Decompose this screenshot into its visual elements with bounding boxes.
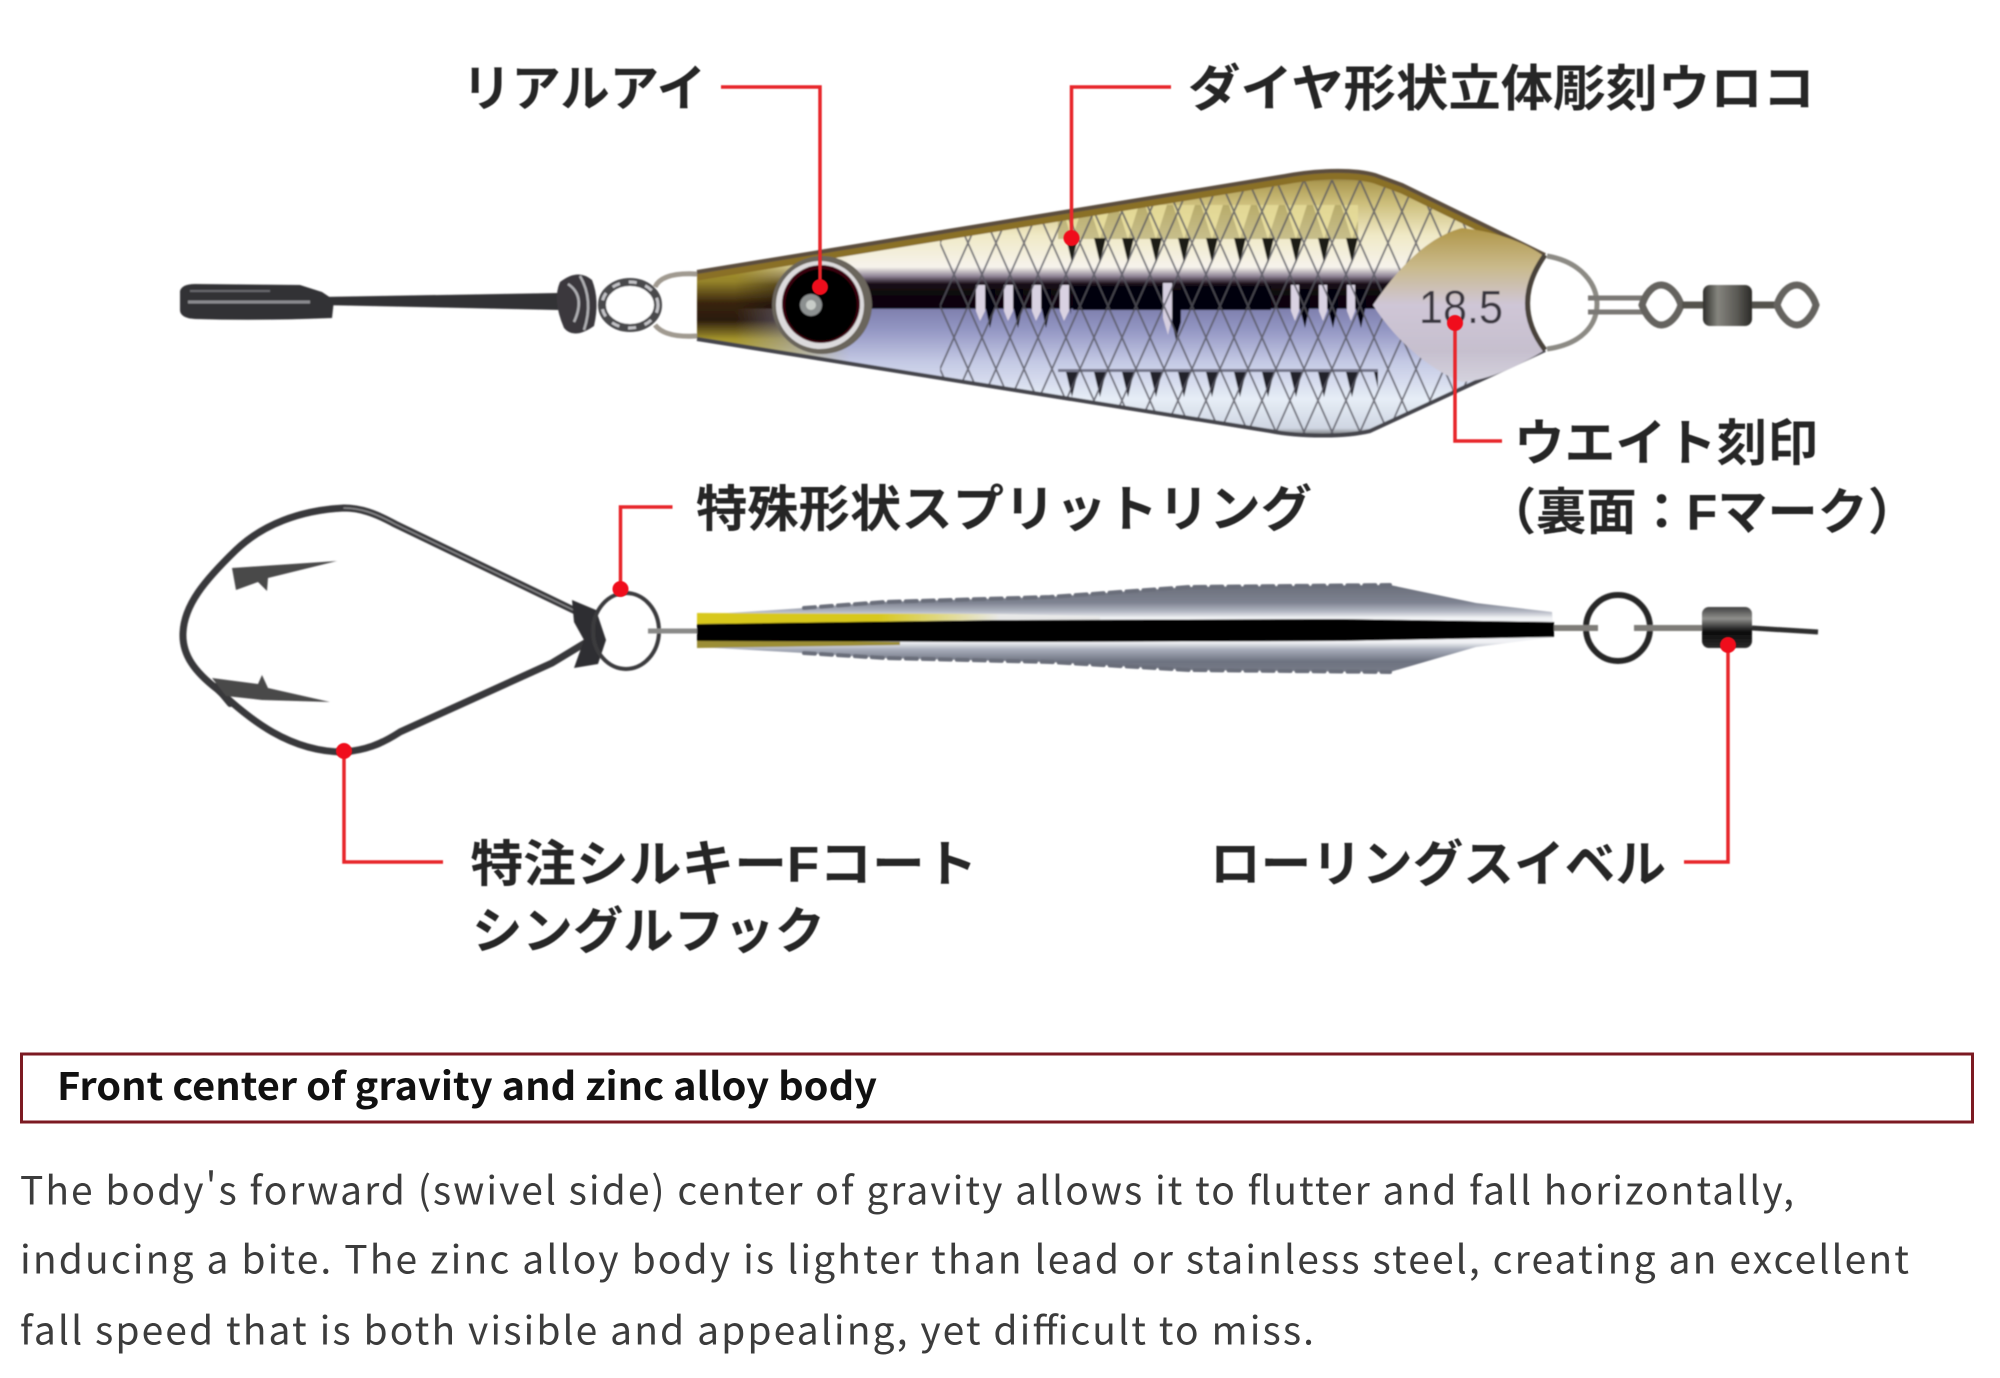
body wire gap [655,274,697,336]
scalloped scale edge [804,585,1390,672]
swivel barrel [1702,607,1752,648]
real eye [772,256,872,354]
tail split ring [1547,256,1597,349]
description text: fall speed that is both visible and appealing, yet difficult to miss. [20,1300,1314,1356]
callout: real eye: リアルアイ [462,61,706,117]
description text: The body's forward (swivel side) center of gravity allows it to flutter and fall horizontally, [20,1160,1794,1216]
body outline [697,171,1545,272]
upper hook point [232,561,337,591]
hook knot [572,600,606,668]
callout: weight stamp: （裏面：Fマーク） [1486,484,1918,540]
lure body [696,172,1502,434]
heading box: Front center of gravity and zinc alloy body [57,1056,877,1111]
slim body black band [697,619,1554,642]
callout: silky coat hook [336,743,978,960]
callout: weight stamp [1447,315,1918,540]
callout: special split ring [612,482,1312,597]
collapsed hook [180,274,597,334]
callout: weight stamp: ウエイト刻印 [1514,416,1818,472]
description text: inducing a bite. The zinc alloy body is lighter than lead or stainless steel, creating an excellent [20,1230,1909,1286]
tail medallion [1373,228,1545,382]
description text [20,1160,1909,1356]
white hole edge [1528,255,1545,350]
callout: rolling swivel [1210,637,1736,892]
weight stamp: 18.5 [1419,281,1503,333]
callout: rolling swivel: ローリングスイベル [1210,836,1666,892]
slim body yellow stripe [697,613,1100,624]
callout: silky coat hook: シングルフック [472,904,825,960]
heading box [22,1054,1972,1122]
connector wire [648,628,697,634]
callout: silky coat hook: 特注シルキーFコート [470,836,978,892]
callout: special split ring: 特殊形状スプリットリング [696,482,1312,538]
lure top view: hook, slim body and swivel [183,508,1818,752]
callout: real eye [462,61,828,295]
callout: diamond scales [1064,61,1815,246]
split ring front [593,593,659,669]
rolling swivel [1588,285,1816,326]
callout: diamond scales: ダイヤ形状立体彫刻ウロコ [1188,61,1815,117]
swivel wires [1554,625,1702,631]
tail ring [1586,595,1650,661]
single hook [183,508,590,752]
split ring on hook side [602,282,658,328]
lower hook point [212,675,330,702]
slim body wings [697,585,1554,672]
lure side view: hook, body and swivel [180,165,1816,445]
swivel tail wire [1752,628,1818,632]
slim body gold edge [697,640,900,648]
